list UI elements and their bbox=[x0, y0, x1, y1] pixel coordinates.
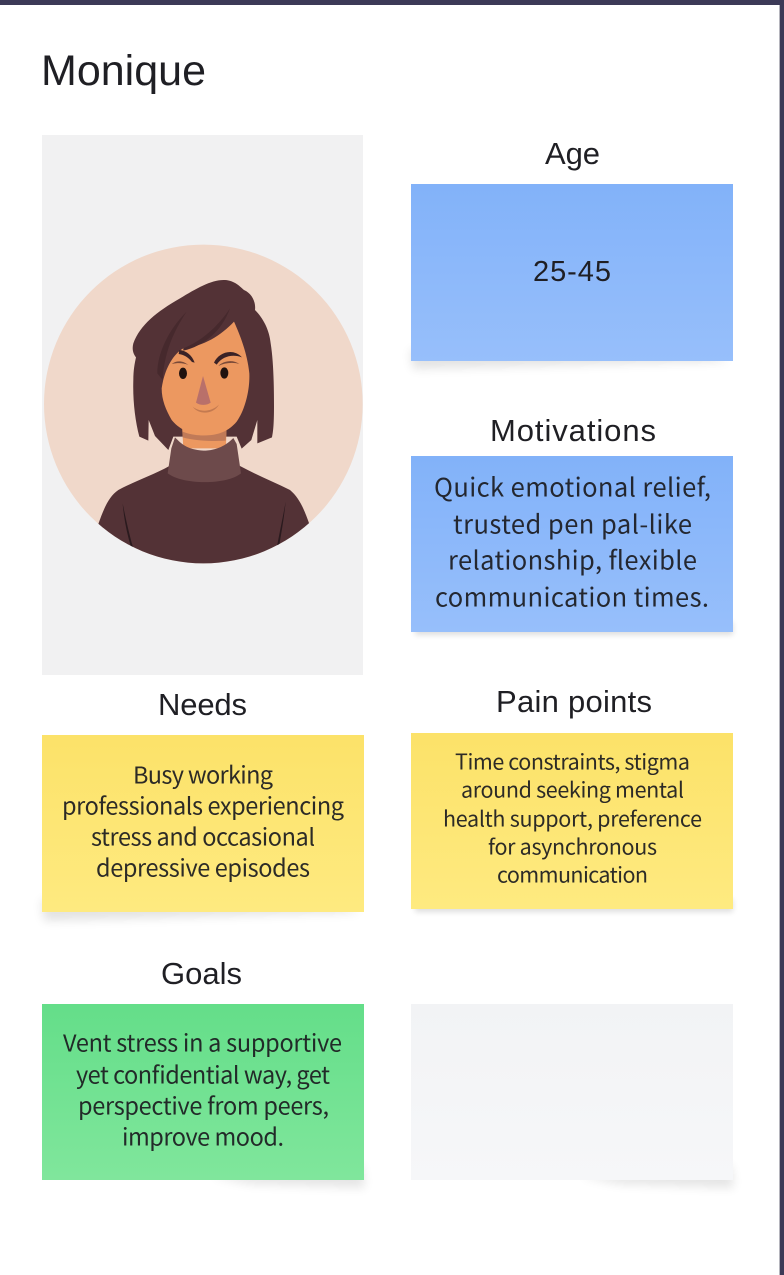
icon: avatar of a woman bbox=[44, 244, 363, 564]
pain points text: health support, preference bbox=[443, 802, 702, 834]
heading: age: Age bbox=[545, 136, 600, 171]
goals text: improve mood. bbox=[122, 1118, 284, 1152]
pain points text: Time constraints, stigma bbox=[455, 746, 690, 776]
goals text: yet confidential way, get bbox=[76, 1056, 330, 1090]
goals text bbox=[63, 1024, 342, 1152]
pain points text: around seeking mental bbox=[461, 774, 684, 804]
age value: 25-45 bbox=[533, 256, 611, 288]
needs text: professionals experiencing bbox=[62, 788, 344, 822]
title: Monique bbox=[41, 47, 206, 95]
panel: blank note bbox=[411, 1004, 734, 1188]
motivations text: relationship, flexible bbox=[448, 540, 697, 578]
goals text: perspective from peers, bbox=[78, 1088, 329, 1122]
heading: needs: Needs bbox=[158, 687, 247, 722]
motivations text: trusted pen pal-like bbox=[453, 504, 692, 542]
motivations text bbox=[434, 468, 711, 614]
panel: goals bbox=[42, 956, 365, 1188]
pain points text: communication bbox=[497, 858, 648, 890]
heading: goals: Goals bbox=[161, 956, 242, 991]
heading: motivations: Motivations bbox=[490, 413, 656, 448]
needs text: depressive episodes bbox=[96, 850, 310, 884]
needs text: stress and occasional bbox=[91, 818, 315, 852]
panel: motivations bbox=[411, 413, 733, 635]
motivations text: Quick emotional relief, bbox=[434, 468, 711, 504]
motivations text: communication times. bbox=[435, 578, 709, 614]
panel: portrait bbox=[42, 135, 363, 675]
heading: pain points: Pain points bbox=[496, 684, 652, 719]
needs text bbox=[62, 756, 344, 884]
panel: age bbox=[410, 136, 733, 369]
panel: pain points bbox=[411, 684, 733, 912]
goals text: Vent stress in a supportive bbox=[63, 1024, 342, 1058]
needs text: Busy working bbox=[133, 756, 273, 790]
panel: needs bbox=[41, 687, 364, 921]
pain points text bbox=[443, 746, 702, 890]
pain points text: for asynchronous bbox=[488, 830, 657, 862]
